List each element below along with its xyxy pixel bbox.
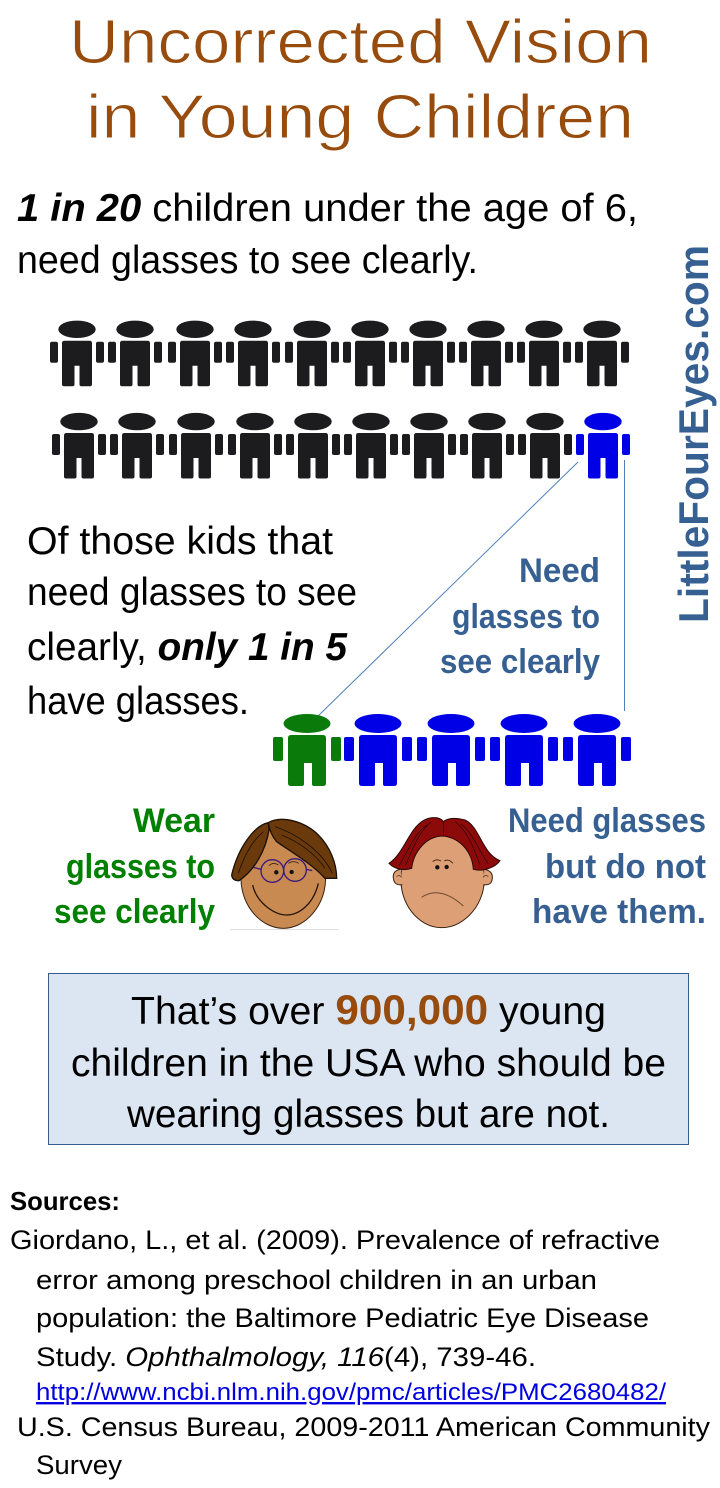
title: in Young Children [86, 83, 634, 152]
sources: Giordano, L., et al. (2009). Prevalence of refractive [10, 1225, 660, 1255]
intro statement [17, 187, 638, 282]
callout: 900,000 children: children in the USA who should be [71, 1042, 666, 1085]
label: need glasses to see clearly: glasses to [452, 598, 600, 636]
statement: only 1 in 5: need glasses to see [27, 571, 357, 614]
icon: smiling child with glasses [230, 819, 338, 930]
pictogram row 2: nine black children and one blue [52, 413, 630, 478]
vertical site name: LittleFourEyes.com [670, 245, 717, 623]
label: need glasses but do not have them: Need glasses [508, 802, 706, 840]
icon: sad child without glasses [389, 818, 500, 928]
sources: Sources: [10, 1186, 120, 1216]
title [69, 8, 652, 152]
label: wear glasses: Wear [133, 802, 215, 840]
label: wear glasses [54, 802, 215, 931]
statement: only 1 in 5: have glasses. [27, 680, 249, 723]
sources: U.S. Census Bureau, 2009-2011 American Community [17, 1412, 711, 1442]
label: need glasses but do not have them: have them. [532, 893, 706, 931]
label: wear glasses: glasses to [66, 848, 215, 886]
label: need glasses to see clearly [440, 552, 600, 681]
intro statement: 1 in 20 children under the age of 6, [17, 187, 638, 230]
sources: http://www.ncbi.nlm.nih.gov/pmc/articles/PMC2680482/ [36, 1379, 666, 1406]
statement: only 1 in 5: Of those kids that [27, 520, 333, 563]
sources [10, 1186, 711, 1480]
callout: 900,000 children: That’s over 900,000 young [131, 986, 606, 1033]
pictogram row 3: one green and four blue children [273, 714, 631, 786]
sources: Study. Ophthalmology, 116 (4), 739-46. [36, 1342, 536, 1372]
zoom connector lines [316, 460, 624, 718]
title: Uncorrected Vision [69, 8, 652, 77]
label: wear glasses: see clearly [54, 893, 215, 931]
label: need glasses but do not have them: but do not [545, 848, 706, 886]
statement: only 1 in 5 [27, 520, 357, 723]
intro statement: need glasses to see clearly. [17, 239, 478, 282]
sources: error among preschool children in an urban [36, 1265, 597, 1295]
callout: 900,000 children [48, 974, 688, 1144]
label: need glasses but do not have them [508, 802, 706, 931]
label: need glasses to see clearly: Need [519, 552, 600, 590]
label: need glasses to see clearly: see clearly [440, 643, 600, 681]
sources: population: the Baltimore Pediatric Eye Disease [36, 1303, 649, 1333]
pictogram row 1: ten children [50, 321, 629, 386]
callout: 900,000 children: wearing glasses but are not. [126, 1093, 610, 1136]
statement: only 1 in 5: clearly, only 1 in 5 [27, 626, 348, 669]
sources: Survey [36, 1450, 122, 1480]
